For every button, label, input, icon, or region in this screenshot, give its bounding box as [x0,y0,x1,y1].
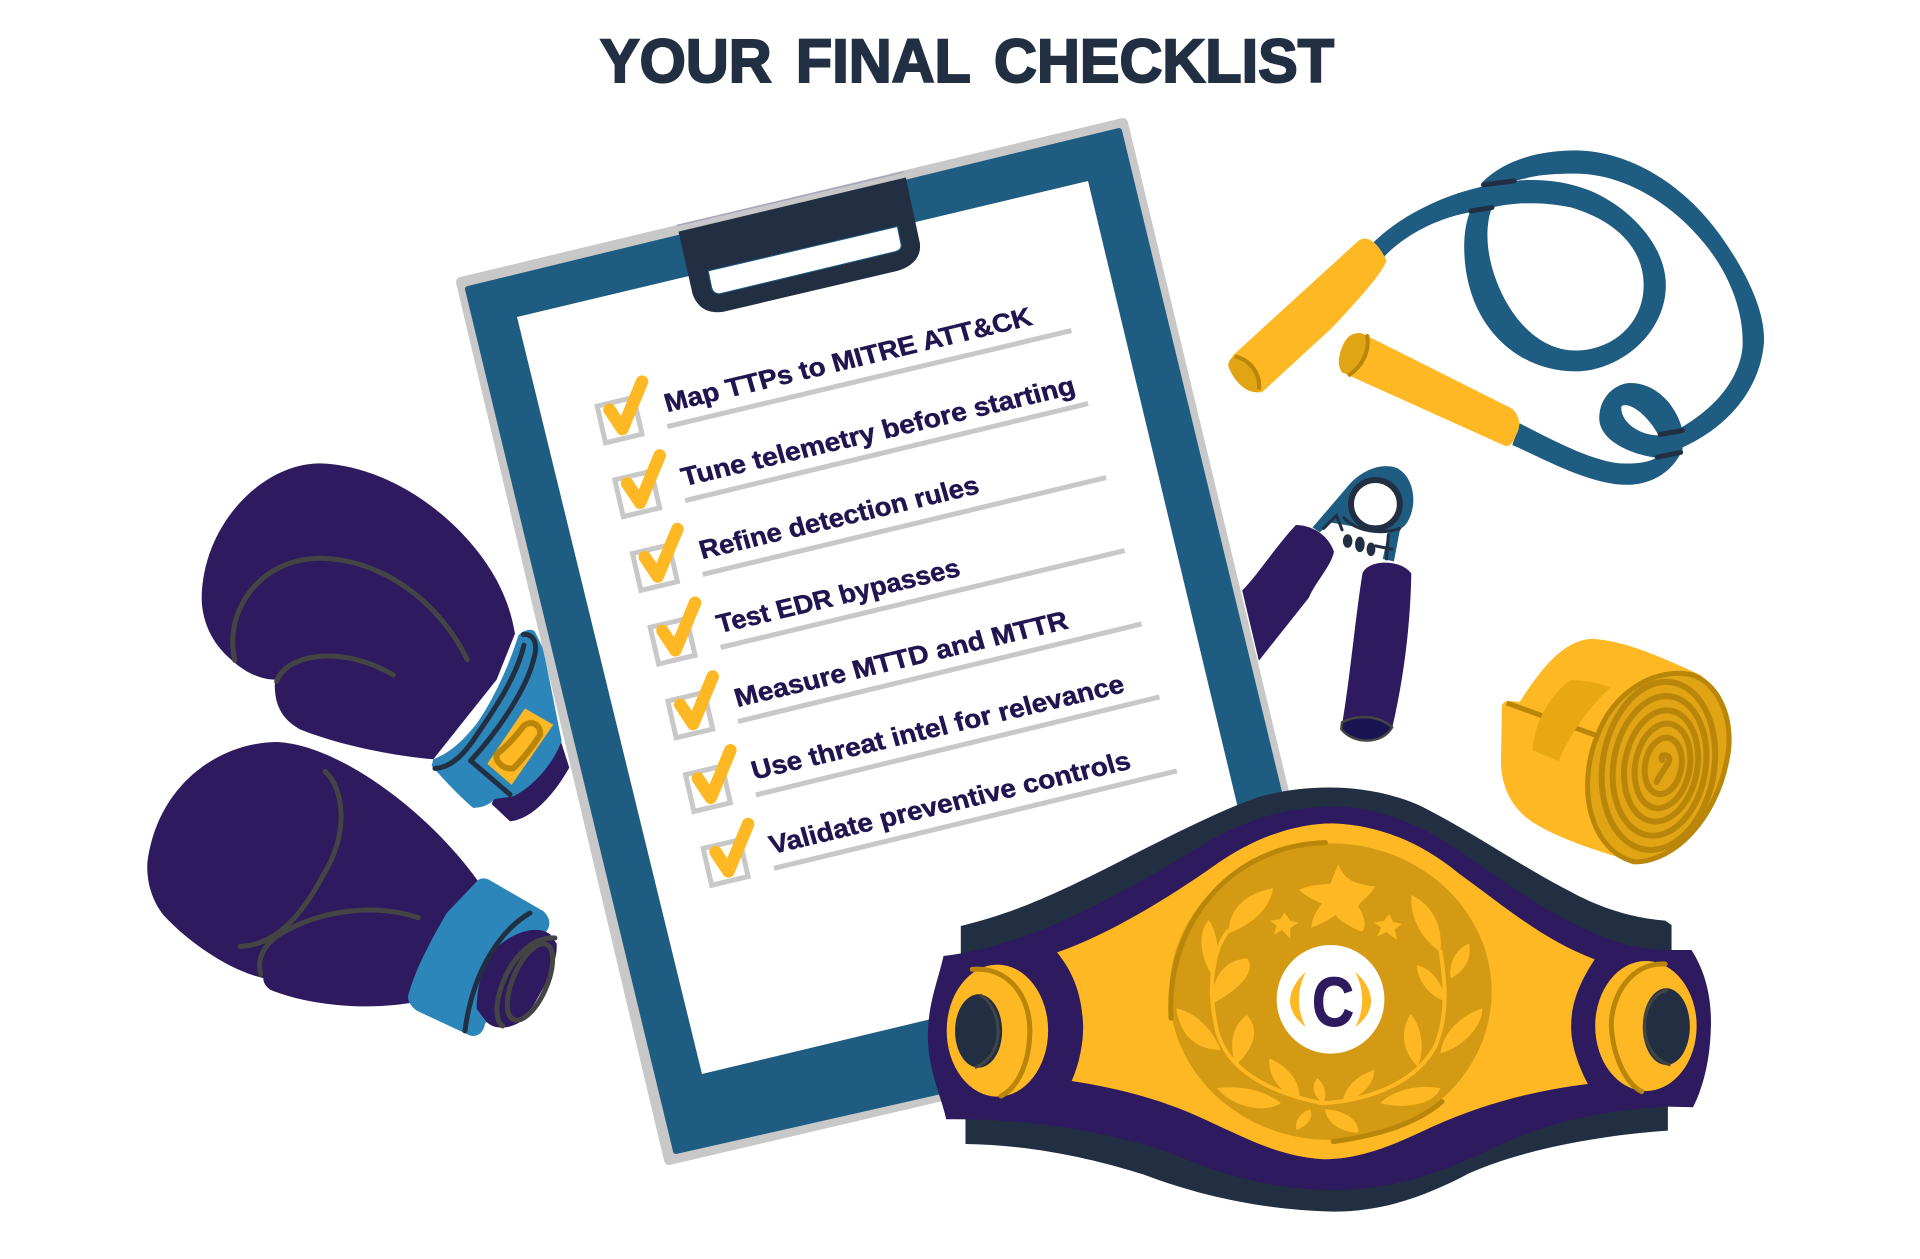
rope [1366,150,1764,485]
item 4: Test EDR bypasses [713,553,963,639]
clipboard [461,123,1335,1160]
lower boxing glove [147,742,562,1036]
clipboard board edge [461,123,1335,1160]
left belt stud [947,965,1048,1097]
upper boxing glove [202,463,569,821]
checklist items [597,301,1177,885]
belt purple body [928,807,1711,1190]
laurel wreath [1176,888,1482,1133]
clipboard board [468,131,1330,1151]
item 5 [668,605,1142,738]
clipboard clip [677,172,920,312]
item 6: Use threat intel for relevance [748,669,1127,785]
medallion [1169,843,1492,1140]
item 6 [686,669,1159,811]
medallion stars [1270,864,1402,940]
logo circle [1277,945,1384,1054]
icon: championship belt [928,787,1711,1212]
logo letter: C [1312,963,1354,1041]
icon: hand wrap roll [1501,639,1735,874]
item 1: Map TTPs to MITRE ATT&CK [661,301,1035,418]
icon: hand gripper [1242,466,1413,740]
item 4 [650,551,1125,664]
belt gold plate [1057,823,1595,1159]
item 2: Tune telemetry before starting [678,370,1078,492]
item 3 [632,470,1106,590]
right belt stud [1595,961,1697,1092]
paper sheet [517,181,1269,1074]
icon: boxing gloves [147,463,569,1036]
item 3: Refine detection rules [695,470,982,565]
lower rope handle [1339,333,1519,446]
item 7 [703,745,1177,885]
item 7: Validate preventive controls [766,745,1134,860]
item 1 [597,301,1071,443]
item 5: Measure MTTD and MTTR [731,605,1072,713]
belt back strap [961,787,1672,1212]
title: YOUR FINAL CHECKLIST [600,27,1334,95]
upper rope handle [1228,239,1386,393]
icon: jump rope [1228,150,1764,485]
